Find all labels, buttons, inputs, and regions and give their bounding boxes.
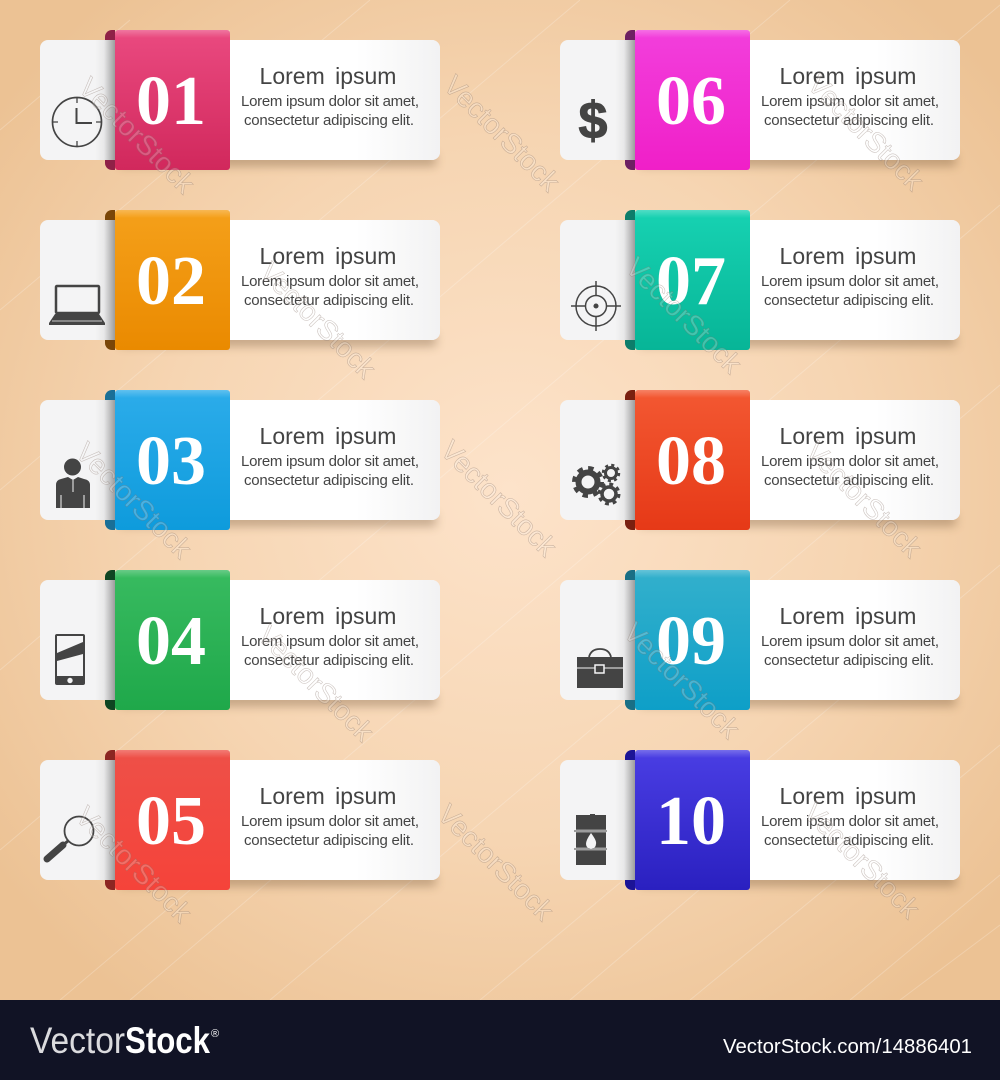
card shadow [120, 334, 436, 346]
heading: Lorem ipsum [260, 63, 396, 89]
number: 09 [656, 603, 726, 680]
heading: Lorem ipsum [780, 423, 916, 449]
item 06 [560, 30, 960, 170]
watermarks: VectorStock [798, 796, 926, 925]
ribbon back [105, 390, 115, 530]
card shadow [640, 874, 956, 886]
footer logo: Vector [30, 1020, 125, 1061]
item 05: consectetur adipiscing elit. [244, 832, 414, 849]
heading: Lorem ipsum [260, 243, 396, 269]
item 09: consectetur adipiscing elit. [764, 652, 934, 669]
card shadow [120, 514, 436, 526]
ribbon front [635, 30, 750, 170]
card [40, 400, 440, 520]
item 08: consectetur adipiscing elit. [764, 472, 934, 489]
item 06: consectetur adipiscing elit. [764, 112, 934, 129]
ribbon back [105, 30, 115, 170]
watermarks: VectorStock [254, 256, 382, 385]
watermarks: VectorStock [620, 251, 748, 380]
number: 08 [656, 423, 726, 500]
number: 03 [136, 423, 206, 500]
card shadow [120, 694, 436, 706]
watermarks: VectorStock [435, 434, 563, 563]
card [40, 580, 440, 700]
watermarks: VectorStock [800, 435, 928, 564]
card shadow [640, 514, 956, 526]
heading: Lorem ipsum [780, 63, 916, 89]
item 01 [40, 30, 440, 170]
watermarks: VectorStock [73, 71, 201, 200]
icon: gears [574, 465, 619, 504]
description: Lorem ipsum dolor sit amet, [241, 453, 419, 470]
footer logo [30, 1020, 219, 1061]
card shadow [120, 874, 436, 886]
number: 04 [136, 603, 206, 680]
item 04 [40, 570, 440, 710]
number: 07 [656, 243, 726, 320]
footer logo: Stock [125, 1020, 210, 1061]
item 08 [560, 390, 960, 530]
watermarks: VectorStock [252, 619, 380, 748]
number: 05 [136, 783, 206, 860]
heading: Lorem ipsum [780, 243, 916, 269]
ribbon front [635, 570, 750, 710]
heading: Lorem ipsum [260, 783, 396, 809]
description: Lorem ipsum dolor sit amet, [761, 813, 939, 830]
number: 10 [656, 783, 726, 860]
card [40, 760, 440, 880]
item 10 [560, 750, 960, 890]
watermarks: VectorStock [618, 616, 746, 745]
item 09 [560, 570, 960, 710]
ribbon front [115, 570, 230, 710]
item 03 [40, 390, 440, 530]
ribbon back [105, 210, 115, 350]
card [560, 40, 960, 160]
item 03: consectetur adipiscing elit. [244, 472, 414, 489]
number: 02 [136, 243, 206, 320]
item 04: consectetur adipiscing elit. [244, 652, 414, 669]
ribbon front [115, 210, 230, 350]
card [40, 220, 440, 340]
item 10: consectetur adipiscing elit. [764, 832, 934, 849]
description: Lorem ipsum dolor sit amet, [761, 93, 939, 110]
icon: clock [52, 98, 102, 146]
item 05 [40, 750, 440, 890]
ribbon back [625, 570, 635, 710]
heading: Lorem ipsum [260, 603, 396, 629]
ribbon back [625, 390, 635, 530]
card shadow [120, 154, 436, 166]
card [560, 580, 960, 700]
heading: Lorem ipsum [780, 603, 916, 629]
card [560, 220, 960, 340]
description: Lorem ipsum dolor sit amet, [241, 633, 419, 650]
card [560, 760, 960, 880]
ribbon front [115, 390, 230, 530]
number: 06 [656, 63, 726, 140]
ribbon back [625, 30, 635, 170]
number: 01 [136, 63, 206, 140]
icon: dollar: $ [579, 92, 608, 150]
ribbon front [635, 750, 750, 890]
card [560, 400, 960, 520]
description: Lorem ipsum dolor sit amet, [761, 633, 939, 650]
ribbon back [625, 210, 635, 350]
item 07 [560, 210, 960, 350]
watermarks: VectorStock [70, 800, 198, 929]
item 01: consectetur adipiscing elit. [244, 112, 414, 129]
ribbon front [635, 210, 750, 350]
card shadow [640, 154, 956, 166]
item 02 [40, 210, 440, 350]
icon: oil barrel [574, 814, 607, 865]
watermarks: VectorStock [802, 68, 930, 197]
description: Lorem ipsum dolor sit amet, [241, 813, 419, 830]
ribbon front [115, 30, 230, 170]
card shadow [640, 694, 956, 706]
watermarks [70, 68, 930, 929]
icon: smartphone [55, 634, 85, 685]
ribbon back [625, 750, 635, 890]
watermarks: VectorStock [70, 436, 198, 565]
item 07: consectetur adipiscing elit. [764, 292, 934, 309]
description: Lorem ipsum dolor sit amet, [241, 93, 419, 110]
ribbon front [635, 390, 750, 530]
icon: magnifier [47, 816, 94, 859]
footer bar [0, 1000, 1000, 1080]
heading: Lorem ipsum [260, 423, 396, 449]
icon: briefcase [577, 649, 623, 688]
description: Lorem ipsum dolor sit amet, [761, 453, 939, 470]
icon: target [571, 281, 621, 331]
ribbon back [105, 750, 115, 890]
footer url: VectorStock.com/14886401 [723, 1036, 972, 1058]
watermarks: VectorStock [432, 798, 560, 927]
card [40, 40, 440, 160]
item 02: consectetur adipiscing elit. [244, 292, 414, 309]
description: Lorem ipsum dolor sit amet, [761, 273, 939, 290]
icon: businessman [56, 458, 90, 508]
footer logo: ® [211, 1028, 219, 1040]
icon: laptop [49, 286, 105, 325]
ribbon back [105, 570, 115, 710]
card shadow [640, 334, 956, 346]
heading: Lorem ipsum [780, 783, 916, 809]
description: Lorem ipsum dolor sit amet, [241, 273, 419, 290]
watermarks: VectorStock [438, 69, 566, 198]
ribbon front [115, 750, 230, 890]
